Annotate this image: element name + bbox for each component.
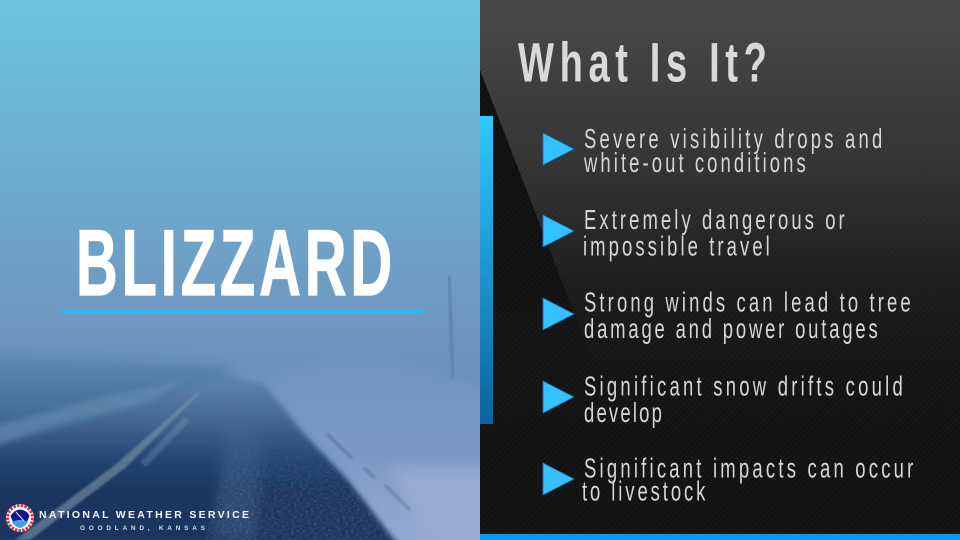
bullet text <box>583 205 845 263</box>
icon: arrow <box>543 463 574 495</box>
bullet text <box>584 372 903 429</box>
bullet text: damage and power outages <box>584 314 878 345</box>
panel: what is it <box>480 0 960 540</box>
bullet text: Significant snow drifts could <box>584 372 903 403</box>
title: BLIZZARD: BLIZZARD <box>76 209 392 315</box>
icon: arrow <box>543 381 574 413</box>
title underline <box>62 309 423 314</box>
utility pole <box>449 276 453 378</box>
bullet: visibility <box>543 124 882 179</box>
accent bar: left <box>480 116 493 424</box>
icon: arrow <box>543 133 574 165</box>
office location: GOODLAND, KANSAS <box>80 525 206 532</box>
icon: NWS seal <box>6 504 34 532</box>
heading: What Is It?: What Is It? <box>518 32 767 94</box>
texture on pavement <box>206 452 394 540</box>
bullet text <box>584 288 911 345</box>
icon: arrow <box>543 215 574 247</box>
rumble strip <box>143 420 186 465</box>
bullet: livestock <box>543 454 913 508</box>
accent bar: bottom <box>480 534 960 540</box>
bullet: winds <box>543 288 911 345</box>
icon: arrow <box>543 298 574 330</box>
bullet text: impossible travel <box>583 232 770 263</box>
bullet text: to livestock <box>582 477 706 508</box>
bullet text <box>582 454 913 508</box>
bullet text: Extremely dangerous or <box>584 205 845 236</box>
logo: NWS footer <box>6 504 249 532</box>
bullet: travel <box>543 205 845 263</box>
dark pavement <box>0 375 400 540</box>
lane line <box>15 392 201 540</box>
agency name: NATIONAL WEATHER SERVICE <box>39 509 249 521</box>
blowing snow over far lanes <box>0 384 174 446</box>
bullet text: white-out conditions <box>583 148 806 179</box>
bullet text: Severe visibility drops and <box>584 124 882 155</box>
bullet text <box>583 124 882 179</box>
bullet text: Significant impacts can occur <box>584 454 913 485</box>
snowy shoulder <box>274 387 480 540</box>
dark haze left of road <box>0 353 232 444</box>
roadside grass <box>327 434 410 510</box>
bullet text: develop <box>584 398 662 429</box>
bullet: drifts <box>543 372 903 429</box>
photo: blizzard road scene <box>0 0 500 540</box>
bullet text: Strong winds can lead to tree <box>584 288 911 319</box>
